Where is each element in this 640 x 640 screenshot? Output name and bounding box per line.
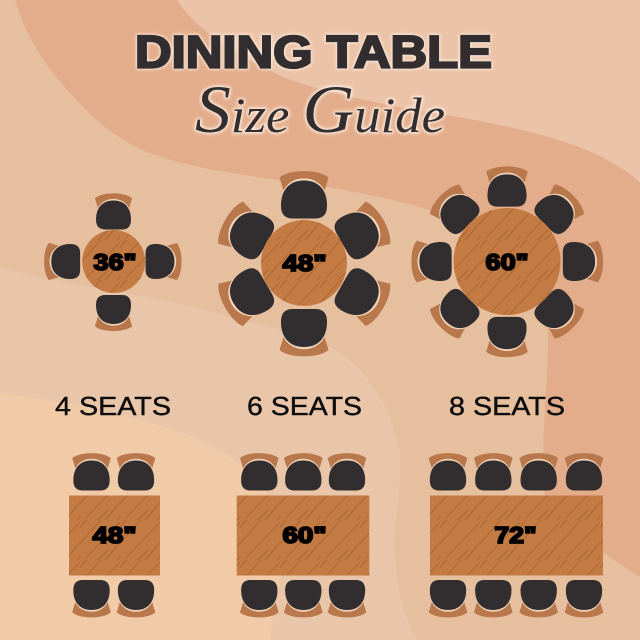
rectangular table 60 inch with 6 chairs bbox=[237, 453, 369, 617]
rectangular table 48 inch with 4 chairs: 48" bbox=[92, 522, 136, 548]
subtitle: Size Guide bbox=[195, 71, 445, 147]
rectangular table 60 inch with 6 chairs: 60" bbox=[282, 522, 326, 548]
rectangular table 72 inch with 8 chairs: 72" bbox=[494, 522, 536, 548]
subtitle: Size Guide bbox=[195, 71, 445, 147]
round table 36 inch with 4 chairs bbox=[44, 193, 182, 331]
label: 8 seats: 8 SEATS bbox=[449, 391, 565, 421]
round table 36 inch with 4 chairs: 36" bbox=[94, 249, 136, 275]
rectangular table 72 inch with 8 chairs bbox=[429, 453, 603, 617]
round table 60 inch with 8 chairs: 60" bbox=[486, 249, 528, 275]
rectangular table 48 inch with 4 chairs bbox=[69, 453, 160, 617]
round table 48 inch with 6 chairs bbox=[213, 171, 396, 356]
title: DINING TABLE bbox=[135, 26, 492, 78]
round table 60 inch with 8 chairs bbox=[411, 166, 603, 357]
label: 6 seats: 6 SEATS bbox=[247, 391, 362, 421]
title: DINING TABLE bbox=[135, 26, 492, 78]
round table 48 inch with 6 chairs: 48" bbox=[282, 250, 326, 276]
label: 4 seats: 4 SEATS bbox=[55, 391, 171, 421]
